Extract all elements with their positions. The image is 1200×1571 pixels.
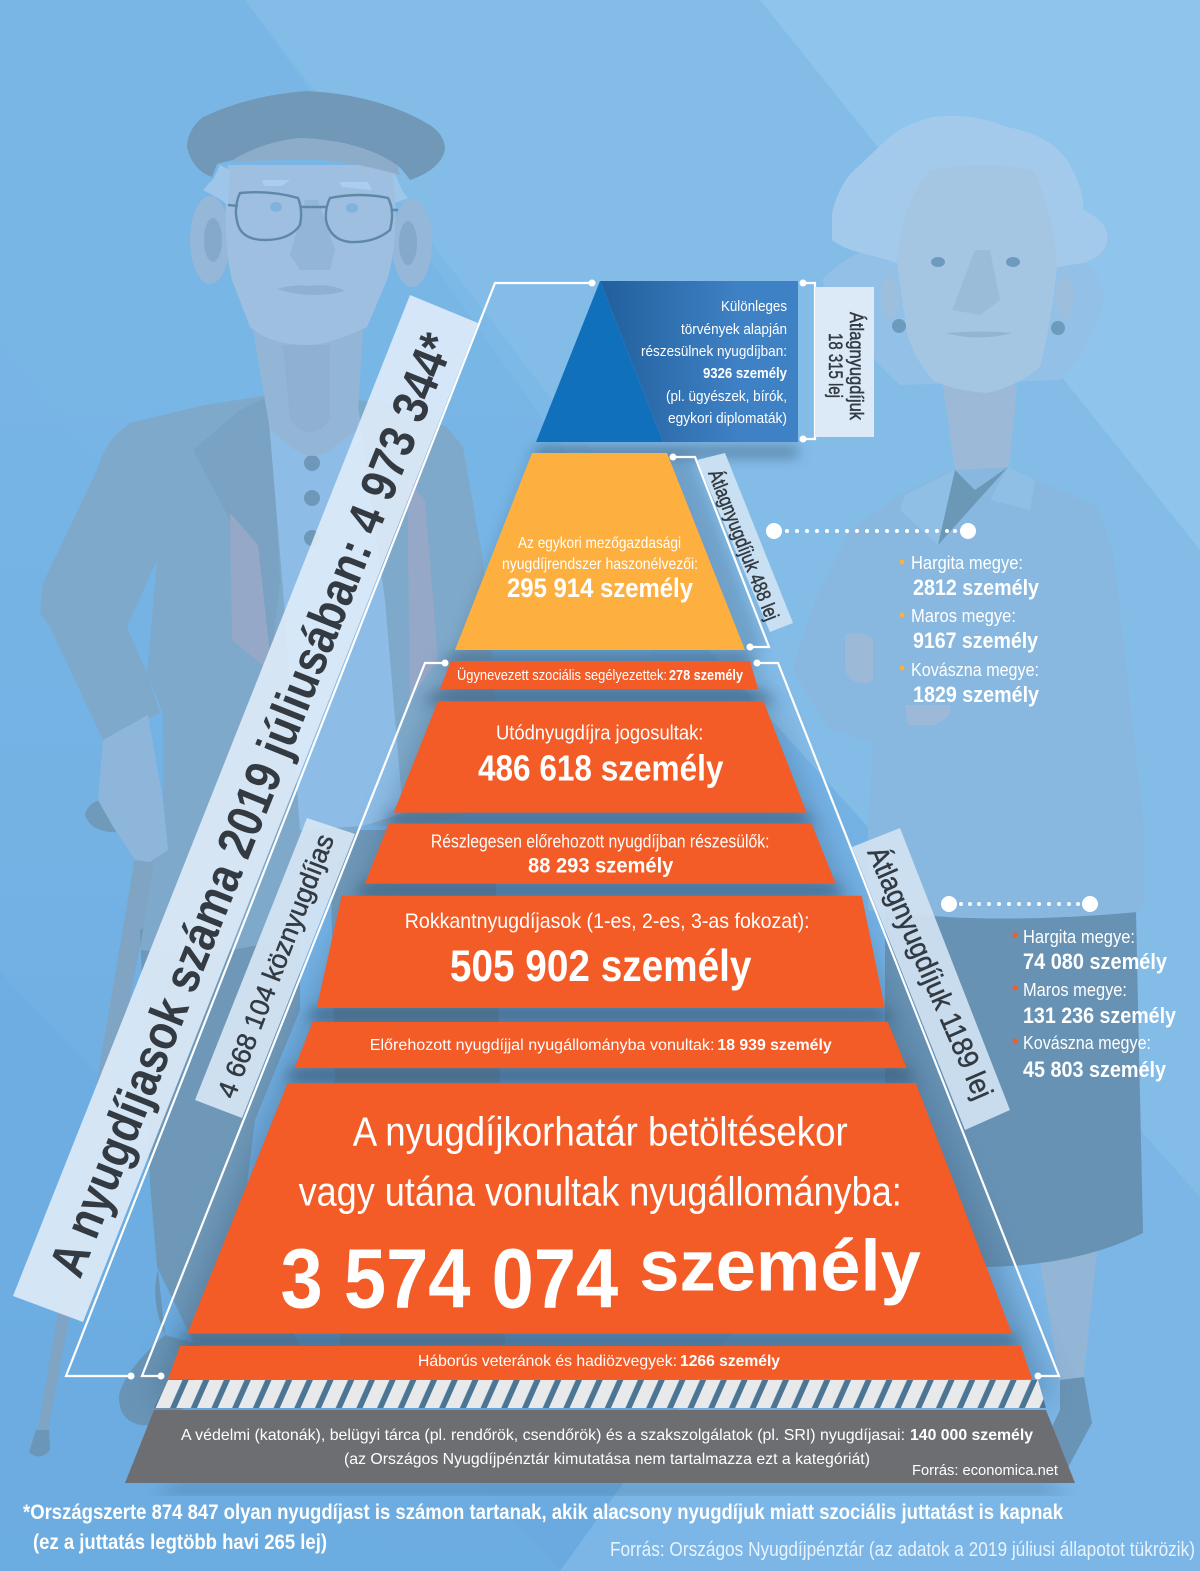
bracket end dots [128, 280, 1042, 1380]
average pension ribbon: agricultural: Átlagnyugdíjuk 488 lej [703, 466, 783, 624]
earrings [892, 319, 1065, 335]
face [897, 165, 1057, 393]
hatch divider [154, 1380, 1046, 1408]
pyramid tier: military: A védelmi (katonák), belügyi tárca (pl. rendőrök, csendőrök) és a szakszolgálatok (pl. SRI) nyugdíjasai: [181, 1427, 905, 1444]
county list: agricultural: 1829 személy [913, 682, 1040, 707]
second trouser leg [330, 830, 505, 1345]
pyramid tier: survivors [394, 701, 807, 813]
illustration: elderly woman [793, 116, 1145, 1473]
pyramid tier: retirement age: 3 574 074 [281, 1232, 618, 1326]
pyramid tier: social aid [440, 661, 758, 689]
connector: agricultural counties [766, 523, 976, 539]
neckline [938, 467, 1008, 545]
lining [230, 513, 272, 673]
pyramid tier: retirement age: vagy utána vonultak nyugállományba: [299, 1168, 902, 1214]
county list: general: Maros megye: [1023, 980, 1127, 1000]
county list: general: 74 080 személy [1023, 949, 1168, 974]
county list: general [1012, 927, 1177, 1082]
shirt [267, 397, 403, 830]
cane [38, 857, 157, 1430]
legs [1040, 1250, 1097, 1385]
pyramid tier: social aid: 278 személy [669, 667, 744, 684]
mouth [277, 285, 345, 295]
eyebrows [262, 180, 372, 190]
county list: agricultural: 2812 személy [913, 575, 1040, 600]
ribbon: average pension general: Átlagnyugdíjuk 1189 lej [861, 842, 999, 1104]
ribbon: general pensions: 4 668 104 köznyugdíjas [212, 830, 340, 1102]
glasses [228, 192, 398, 242]
pyramid tier: special laws: (pl. ügyészek, bírók, [666, 388, 787, 405]
ribbon: total pensioners: A nyugdíjasok száma 2019 júliusában: 4 973 344* [38, 325, 465, 1284]
pyramid tier: disability: Rokkantnyugdíjasok (1-es, 2-es, 3-as fokozat): [405, 910, 810, 933]
pyramid tier: disability [317, 896, 885, 1008]
mouth [945, 332, 1012, 338]
connector: general counties [941, 896, 1098, 912]
pyramid tier: special laws: egykori diplomaták) [668, 410, 787, 427]
coat [793, 467, 1145, 918]
footnote: *Országszerte 874 847 olyan nyugdíjast is számon tartanak, akik alacsony nyugdíjuk miatt szociális juttatást is kapnak [23, 1501, 1063, 1524]
pyramid tier: retirement age: személy [639, 1227, 921, 1307]
pyramid tier: veterans: 1266 személy [680, 1353, 780, 1370]
pyramid tier: partial early: Részlegesen előrehozott nyugdíjban részesülők: [431, 832, 770, 852]
county list: agricultural: Hargita megye: [911, 553, 1023, 573]
trousers [140, 830, 300, 1345]
pyramid tier: agricultural: Az egykori mezőgazdasági [518, 535, 681, 552]
footnote [23, 1501, 1063, 1554]
pyramid tier: agricultural [455, 453, 745, 650]
hair [203, 165, 230, 205]
back hair [822, 248, 1105, 385]
hair [832, 116, 1107, 267]
face [226, 165, 395, 345]
jacket [40, 395, 505, 952]
average pension box: special laws: Átlagnyugdíjuk [845, 312, 866, 420]
ears [881, 275, 1074, 319]
pyramid tier: agricultural: 295 914 személy [507, 573, 693, 603]
county list: general: 45 803 személy [1023, 1057, 1167, 1082]
pyramid tier: early retirement [295, 1022, 907, 1068]
bracket lines [66, 283, 1059, 1376]
shoe [1030, 1377, 1092, 1473]
illustration: elderly man [29, 91, 505, 1457]
shoe [119, 1270, 200, 1425]
pyramid tier: early retirement: Előrehozott nyugdíjjal nyugállományba vonultak: [370, 1036, 714, 1054]
pyramid tier: special laws: törvények alapján [681, 321, 787, 338]
county list: agricultural [900, 553, 1040, 707]
neck [253, 330, 363, 456]
county list: agricultural: Maros megye: [911, 606, 1016, 626]
county list: general: 131 236 személy [1023, 1003, 1177, 1028]
pyramid tier: veterans [168, 1346, 1032, 1379]
pyramid tier: military: Forrás: economica.net [912, 1462, 1059, 1479]
neck [943, 385, 1017, 470]
ears [190, 196, 230, 284]
pyramid tier: special laws: Különleges [721, 298, 787, 315]
pyramid tier: survivors: 486 618 személy [478, 748, 723, 789]
footnote: (ez a juttatás legtöbb havi 265 lej) [33, 1531, 327, 1554]
pyramid tier: partial early [365, 824, 836, 884]
pyramid tier: military [125, 1410, 1075, 1483]
cap [187, 91, 445, 180]
county list: agricultural: 9167 személy [913, 628, 1039, 653]
pyramid tier: special laws: 9326 személy [703, 365, 788, 382]
pyramid tier: special laws [536, 281, 798, 442]
pyramid tier: social aid: Ügynevezett szociális segélyezettek: [457, 666, 667, 684]
skirt [885, 912, 1143, 1267]
pyramid tier: special laws: részesülnek nyugdíjban: [641, 343, 787, 360]
pyramid tier: retirement age: A nyugdíjkorhatár betöltésekor [353, 1108, 848, 1154]
hands [845, 633, 873, 683]
pyramid tier: agricultural: nyugdíjrendszer haszonélvezői: [502, 556, 698, 573]
hand [98, 715, 168, 862]
average pension box: special laws [815, 287, 874, 437]
shirt buttons [304, 455, 320, 546]
eyes [270, 202, 358, 213]
eyes [931, 257, 1020, 267]
average pension box: special laws: 18 315 lej [824, 333, 845, 398]
county list: general: Hargita megye: [1023, 927, 1135, 947]
pyramid tier: early retirement: 18 939 személy [717, 1036, 832, 1054]
pyramid tier: survivors: Utódnyugdíjra jogosultak: [496, 722, 703, 744]
pyramid tier: retirement age [187, 1083, 1012, 1334]
pyramid tier: military: (az Országos Nyugdíjpénztár kimutatása nem tartalmazza ezt a kategóriát) [344, 1451, 870, 1468]
pyramid tier: veterans: Háborús veteránok és hadiözvegyek: [418, 1353, 677, 1370]
county list: general: Kovászna megye: [1023, 1033, 1151, 1053]
county list: agricultural: Kovászna megye: [911, 660, 1039, 680]
pyramid tier: military: 140 000 személy [910, 1427, 1033, 1444]
pyramid shadows [150, 448, 1075, 1494]
pyramid tier: partial early: 88 293 személy [528, 855, 674, 878]
pyramid tier: disability: 505 902 személy [450, 942, 752, 991]
